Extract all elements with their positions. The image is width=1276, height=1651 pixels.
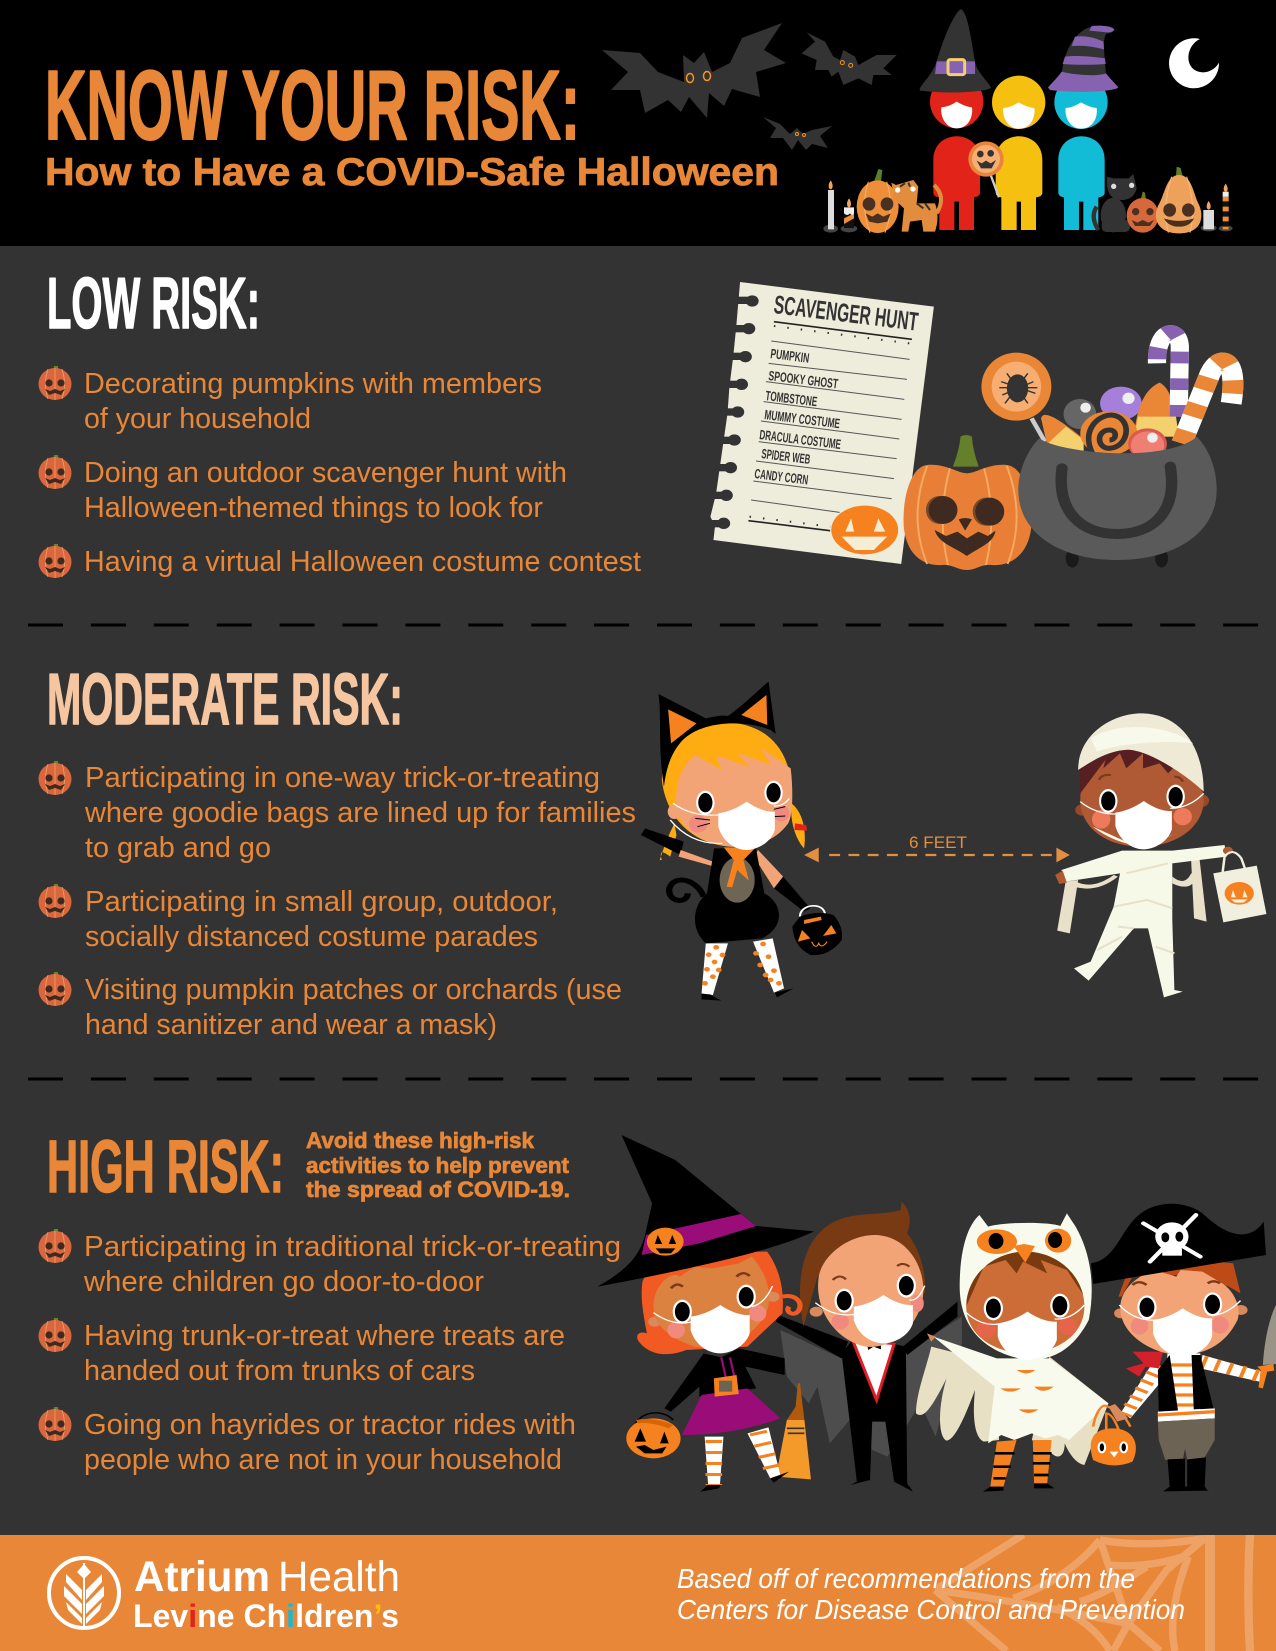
- moderate risk list: Participating in small group, outdoor,: [85, 886, 558, 918]
- illustration: scavenger hunt, pumpkin and cauldron: [710, 282, 1233, 570]
- illustration: six feet apart: [641, 682, 1266, 1001]
- scavenger hunt paper: TOMBSTONE: [765, 388, 818, 409]
- arrow: six feet: [804, 848, 1070, 862]
- moderate risk list: where goodie bags are lined up for families: [84, 797, 636, 829]
- icon: left candle: [823, 180, 838, 233]
- scavenger hunt paper: SPIDER WEB: [761, 446, 811, 467]
- scavenger hunt paper: CANDY CORN: [754, 466, 809, 488]
- character: mummy: [1055, 713, 1266, 997]
- divider: [28, 1078, 1259, 1080]
- logo wordmark: Atrium: [134, 1553, 270, 1601]
- high risk list: [83, 1231, 621, 1476]
- source note: Centers for Disease Control and Prevention: [677, 1594, 1185, 1625]
- candy: balls and corn: [1041, 383, 1179, 453]
- heading: low risk: LOW RISK:: [47, 264, 260, 344]
- low risk list: Halloween-themed things to look for: [84, 492, 544, 524]
- source note: [677, 1563, 1185, 1625]
- source note: Based off of recommendations from the: [677, 1563, 1135, 1594]
- panel: high risk: [38, 1125, 621, 1476]
- note: avoid high risk: activities to help prevent: [306, 1153, 570, 1178]
- icon: small bat: [763, 117, 832, 150]
- panel: moderate risk: [38, 660, 636, 1041]
- illustration: four children in costumes: [597, 1135, 1276, 1492]
- character: cat girl: [641, 682, 842, 1001]
- cauldron: [1018, 437, 1217, 568]
- icon: tall striped candle: [1219, 184, 1233, 231]
- icon: black cat: [1094, 174, 1137, 232]
- icon: moon: [1169, 38, 1219, 88]
- logo: Atrium Health Levine Children's: [49, 1553, 400, 1634]
- scavenger hunt paper: DRACULA COSTUME: [759, 427, 842, 452]
- candy: lollipop: [981, 353, 1051, 442]
- bullet icons: [38, 761, 72, 1006]
- icon: lollipop: [968, 141, 1004, 197]
- high risk list: where children go door-to-door: [83, 1266, 485, 1298]
- high risk list: Participating in traditional trick-or-treating: [84, 1231, 621, 1263]
- icon: small jack-o-lantern: [1127, 192, 1159, 233]
- scavenger hunt paper: SCAVENGER HUNT: [772, 289, 920, 337]
- moderate risk list: Participating in one-way trick-or-treating: [85, 762, 600, 794]
- moderate risk list: Visiting pumpkin patches or orchards (use: [85, 974, 622, 1006]
- logo wordmark: Health: [278, 1553, 400, 1601]
- figure: red person with witch hat: [920, 9, 991, 230]
- icon: tall jack-o-lantern: [1156, 167, 1201, 233]
- icon: pumpkin: [857, 169, 899, 233]
- low risk list: [84, 368, 641, 578]
- moderate risk list: [84, 762, 636, 1041]
- high risk list: people who are not in your household: [84, 1444, 562, 1476]
- title: KNOW YOUR RISK:: [45, 50, 580, 160]
- figure: yellow person: [992, 76, 1045, 230]
- header band: [0, 0, 1276, 246]
- note: avoid high risk: [306, 1128, 570, 1202]
- note: avoid high risk: Avoid these high-risk: [306, 1128, 535, 1153]
- scavenger hunt paper: SPOOKY GHOST: [768, 368, 839, 392]
- footer band: [0, 1535, 1276, 1651]
- decorative web: [935, 1535, 1250, 1651]
- icon: small striped candle: [841, 198, 857, 232]
- header illustration: family in costume: [802, 9, 1233, 233]
- bullet icons: [38, 1229, 72, 1441]
- scavenger hunt paper: PUMPKIN: [770, 346, 810, 366]
- character: vampire: [776, 1202, 962, 1492]
- moderate risk list: socially distanced costume parades: [85, 921, 538, 953]
- low risk list: of your household: [84, 403, 311, 435]
- low risk list: Having a virtual Halloween costume contest: [84, 546, 641, 578]
- high risk list: Having trunk-or-treat where treats are: [84, 1320, 565, 1352]
- scavenger hunt paper: MUMMY COSTUME: [764, 407, 841, 431]
- high risk list: Going on hayrides or tractor rides with: [84, 1409, 576, 1441]
- character: owl: [916, 1213, 1136, 1492]
- icon: orange cat: [891, 180, 941, 232]
- icon: bat: [802, 32, 897, 85]
- heading: high risk: HIGH RISK:: [47, 1125, 284, 1208]
- figure: blue person with striped hat: [1048, 26, 1118, 230]
- low risk list: Doing an outdoor scavenger hunt with: [84, 457, 567, 489]
- character: pirate: [1091, 1204, 1276, 1491]
- note: avoid high risk: the spread of COVID-19.: [306, 1177, 570, 1202]
- candy canes: [1157, 333, 1233, 443]
- paper mini pumpkin: [831, 506, 898, 554]
- scavenger hunt paper: [710, 282, 934, 564]
- logo wordmark: [133, 1553, 400, 1634]
- character: witch: [597, 1135, 814, 1492]
- low risk list: Decorating pumpkins with members: [84, 368, 542, 400]
- logo mark: [49, 1558, 119, 1628]
- candy: red ball: [1128, 428, 1167, 460]
- candy swirl: [1080, 411, 1137, 455]
- logo wordmark: Levine Children’s: [133, 1598, 399, 1634]
- big jack-o-lantern: [903, 435, 1032, 570]
- divider: [28, 624, 1259, 626]
- icon: white candle: [1201, 201, 1217, 231]
- high risk list: handed out from trunks of cars: [84, 1355, 475, 1387]
- bullet icons: [38, 366, 72, 578]
- moderate risk list: to grab and go: [85, 832, 271, 864]
- moderate risk list: hand sanitizer and wear a mask): [85, 1009, 497, 1041]
- heading: moderate risk: MODERATE RISK:: [47, 660, 403, 740]
- subtitle: How to Have a COVID-Safe Halloween: [45, 151, 779, 194]
- icon: big bat: [602, 23, 786, 118]
- label: 6 feet: 6 FEET: [909, 833, 967, 852]
- panel: low risk: [38, 264, 641, 578]
